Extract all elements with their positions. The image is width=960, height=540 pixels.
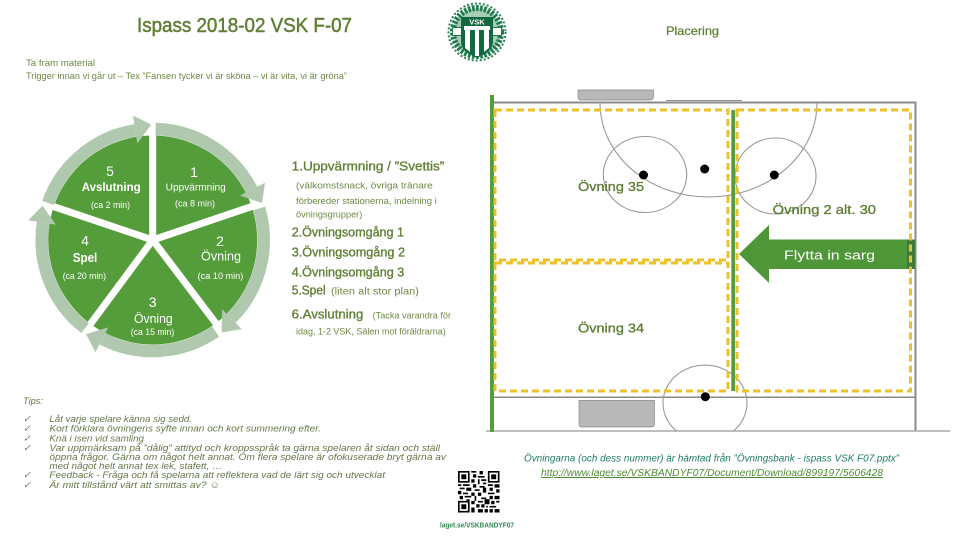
session outline list: (välkomstsnack, övriga tränare bbox=[296, 180, 433, 190]
rink diagram bbox=[486, 90, 950, 432]
intro text: Ta fram material bbox=[26, 58, 95, 68]
tips: Feedback - Fråga och få spelarna att reflektera vad de lärt sig och utvecklat bbox=[49, 470, 385, 481]
yellow zones bbox=[495, 110, 910, 391]
bottom bench bbox=[579, 400, 654, 427]
zone label 2 alt 30: Övning 2 alt. 30 bbox=[773, 202, 876, 217]
tips: Kort förklara övningens syfte innan och kort summering efter. bbox=[49, 424, 321, 435]
source note: http://www.laget.se/VSKBANDYF07/Document/Download/899197/5606428 bbox=[541, 468, 883, 479]
QR caption: laget.se/VSKBANDYF07 bbox=[440, 522, 514, 530]
icon: club logo bbox=[448, 4, 506, 60]
session outline list: övningsgrupper) bbox=[296, 210, 362, 220]
segment 3 labels: Övning bbox=[134, 312, 173, 326]
segment 3 labels: 3 bbox=[149, 294, 157, 310]
tips: ✓ bbox=[23, 443, 31, 454]
tips: ✓ bbox=[23, 470, 31, 481]
wheel disc bbox=[48, 136, 257, 344]
rink lines bbox=[486, 100, 950, 431]
segment 2 labels bbox=[198, 233, 243, 281]
segment 5 labels: Avslutning bbox=[82, 180, 141, 194]
session outline list: (Tacka varandra för bbox=[373, 310, 451, 320]
chart: session wheel bbox=[0, 99, 293, 396]
top bench bbox=[578, 90, 654, 100]
segment 2 labels: 2 bbox=[216, 233, 224, 249]
session outline list: 4.Övningsomgång 3 bbox=[292, 265, 404, 280]
session outline list: (liten alt stor plan) bbox=[331, 286, 419, 297]
tips: ✓ bbox=[23, 480, 31, 491]
zone label 34: Övning 34 bbox=[578, 321, 644, 336]
intro text bbox=[26, 58, 347, 81]
source note bbox=[524, 453, 900, 479]
tips: öppna frågor. Gärna om något helt annat. Om flera spelare är ofokuserade bryt gärna av bbox=[49, 452, 447, 463]
session outline list: 6.Avslutning bbox=[292, 306, 363, 321]
session outline list: idag, 1-2 VSK, Sälen mot föräldrarna) bbox=[296, 326, 446, 336]
face-off arc and circles bbox=[600, 103, 817, 431]
wheel gaps bbox=[43, 128, 262, 330]
segment 4 labels: (ca 20 min) bbox=[63, 271, 106, 281]
arrow: move boards: Flytta in sarg bbox=[784, 248, 875, 262]
segment 1 labels: Uppvärmning bbox=[166, 183, 226, 194]
session outline list: 3.Övningsomgång 2 bbox=[292, 245, 405, 260]
tips: Knä i isen vid samling bbox=[49, 434, 145, 444]
tips: ✓ bbox=[23, 434, 31, 444]
centre green divider bbox=[731, 110, 735, 391]
tips: med något helt annat tex lek, stafett, … bbox=[49, 461, 222, 472]
tips: ✓ bbox=[23, 414, 31, 425]
tips: Är mitt tillstånd värt att smittas av? ☺ bbox=[48, 480, 220, 491]
icon: club logo: VSK bbox=[469, 18, 485, 26]
session outline list bbox=[292, 159, 451, 336]
segment 1 labels: 1 bbox=[190, 164, 198, 180]
segment 5 labels bbox=[82, 163, 141, 210]
title: Ispass 2018-02 VSK F-07 bbox=[137, 15, 352, 37]
placement heading: Placering bbox=[666, 24, 719, 38]
arrow ring bbox=[0, 99, 293, 396]
segment 1 labels bbox=[166, 164, 226, 209]
left green boundary bbox=[490, 95, 494, 432]
tips: Låt varje spelare känna sig sedd. bbox=[49, 414, 192, 425]
segment 4 labels: 4 bbox=[81, 233, 89, 249]
segment 3 labels: (ca 15 min) bbox=[131, 327, 174, 337]
segment 5 labels: (ca 2 min) bbox=[91, 200, 130, 210]
tips: Var uppmärksam på ”dålig” attityd och kroppsspråk ta gärna spelaren åt sidan och ställ bbox=[49, 443, 441, 454]
tips: ✓ bbox=[23, 424, 31, 435]
face-off dots bbox=[639, 164, 779, 401]
source note: Övningarna (och dess nummer) är hämtad från ”Övningsbank - ispass VSK F07.pptx” bbox=[524, 453, 900, 465]
segment 1 labels: (ca 8 min) bbox=[175, 199, 215, 209]
QR code bbox=[458, 471, 500, 512]
segment 2 labels: Övning bbox=[201, 250, 241, 264]
segment 4 labels: Spel bbox=[73, 251, 97, 265]
tips bbox=[23, 396, 447, 491]
tips: Tips: bbox=[23, 396, 43, 407]
arrow: move boards bbox=[739, 225, 915, 283]
session outline list: 5.Spel bbox=[292, 282, 326, 297]
segment 4 labels bbox=[63, 233, 106, 281]
zone label 35: Övning 35 bbox=[578, 179, 644, 194]
segment 3 labels bbox=[131, 294, 174, 337]
session outline list: 1.Uppvärmning / ”Svettis” bbox=[292, 159, 444, 174]
session outline list: förbereder stationerna, indelning i bbox=[296, 196, 437, 206]
intro text: Trigger innan vi går ut – Tex ”Fansen tycker vi är sköna – vi är vita, vi är gröna” bbox=[26, 71, 347, 81]
segment 2 labels: (ca 10 min) bbox=[198, 271, 243, 281]
session outline list: 2.Övningsomgång 1 bbox=[292, 225, 404, 240]
segment 5 labels: 5 bbox=[106, 163, 114, 179]
